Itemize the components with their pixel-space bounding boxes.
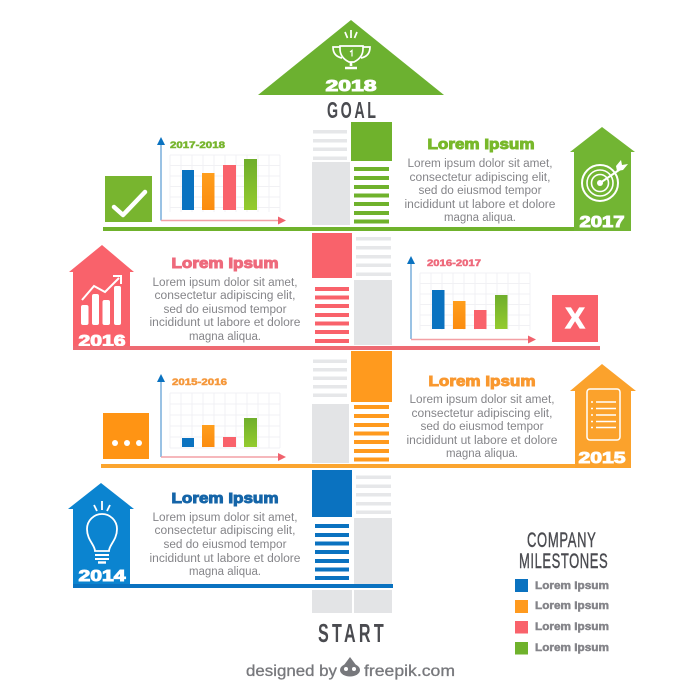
legend title: MILESTONES bbox=[519, 549, 608, 573]
icon: trophy bbox=[333, 30, 370, 68]
text block: magna aliqua. bbox=[189, 566, 261, 578]
central column: 2015 segment bbox=[312, 351, 392, 463]
house 2015: 2015 bbox=[578, 450, 626, 467]
text block: Lorem ipsum dolor sit amet, bbox=[152, 512, 298, 524]
legend: Lorem Ipsum bbox=[535, 642, 609, 654]
text block: sed do eiusmod tempor bbox=[164, 539, 287, 551]
text block: consectetur adipiscing elit, bbox=[410, 172, 550, 184]
text block: Lorem ipsum dolor sit amet, bbox=[152, 277, 298, 289]
text block bbox=[150, 512, 300, 578]
footer credit: designed by bbox=[246, 663, 337, 680]
bar chart 2015-2016: 2015-2016 bbox=[172, 377, 227, 388]
heading: Lorem Ipsum bbox=[428, 136, 534, 153]
label: start: START bbox=[318, 618, 384, 648]
icon: rising chart bbox=[81, 276, 121, 325]
panel: 2016 bbox=[69, 245, 600, 350]
icon: light bulb bbox=[87, 501, 117, 562]
heading: Lorem Ipsum bbox=[172, 490, 278, 507]
status box: cross bbox=[552, 295, 598, 342]
text block: consectetur adipiscing elit, bbox=[154, 290, 296, 302]
text block bbox=[406, 394, 558, 460]
text block: incididunt ut labore et dolore bbox=[150, 317, 300, 329]
text block: magna aliqua. bbox=[446, 448, 518, 460]
house 2016: 2016 bbox=[78, 333, 126, 350]
bar chart 2015-2016 bbox=[157, 374, 286, 461]
icon: target bbox=[582, 160, 628, 201]
baseline bbox=[73, 584, 393, 588]
bar chart 2016-2017: 2016-2017 bbox=[427, 258, 481, 269]
text block bbox=[404, 158, 556, 224]
text block: sed do eiusmod tempor bbox=[164, 304, 287, 316]
heading: Lorem Ipsum bbox=[428, 373, 536, 390]
legend bbox=[515, 528, 609, 654]
text block: incididunt ut labore et dolore bbox=[404, 199, 556, 211]
central column: 2016 segment bbox=[312, 233, 392, 345]
house 2017 bbox=[570, 127, 635, 231]
baseline bbox=[103, 227, 631, 231]
text block bbox=[150, 277, 300, 343]
status box: in progress bbox=[103, 413, 149, 459]
text block: magna aliqua. bbox=[189, 331, 261, 343]
footer credit: freepik.com bbox=[364, 663, 455, 680]
legend title bbox=[519, 528, 608, 573]
panel: 2015 bbox=[101, 364, 636, 468]
text block: incididunt ut labore et dolore bbox=[406, 435, 558, 447]
goal arrowhead 2018 bbox=[258, 20, 444, 95]
year 2018: 2018 bbox=[326, 78, 377, 95]
baseline bbox=[101, 464, 631, 468]
status box: check mark bbox=[105, 176, 152, 222]
bar chart 2017-2018 bbox=[157, 137, 286, 224]
heading: Lorem Ipsum bbox=[172, 255, 278, 272]
text block: Lorem ipsum dolor sit amet, bbox=[410, 394, 554, 406]
text block: magna aliqua. bbox=[444, 212, 516, 224]
legend: Lorem Ipsum bbox=[535, 580, 609, 592]
panel: 2014 bbox=[68, 483, 393, 588]
text block: Lorem ipsum dolor sit amet, bbox=[408, 158, 552, 170]
text block: sed do eiusmod tempor bbox=[418, 185, 542, 197]
panel: 2017 bbox=[103, 127, 635, 231]
house 2016 bbox=[69, 245, 134, 350]
baseline bbox=[73, 346, 600, 350]
status box: cross: X bbox=[565, 303, 585, 335]
label: goal: GOAL bbox=[327, 99, 376, 124]
icon: freepik mascot bbox=[340, 657, 360, 676]
footer credit bbox=[246, 657, 455, 680]
icon: document bbox=[587, 389, 620, 440]
text block: sed do eiusmod tempor bbox=[420, 421, 544, 433]
bar chart 2016-2017 bbox=[407, 256, 536, 344]
central column: 2017 segment bbox=[312, 122, 392, 225]
house 2017: 2017 bbox=[580, 214, 625, 231]
house 2014 bbox=[68, 483, 134, 588]
central column: 2014 segment bbox=[312, 470, 392, 613]
legend title: COMPANY bbox=[527, 528, 596, 552]
legend: Lorem Ipsum bbox=[535, 600, 609, 612]
house 2015 bbox=[570, 364, 636, 468]
bar chart 2017-2018: 2017-2018 bbox=[170, 140, 225, 151]
text block: incididunt ut labore et dolore bbox=[150, 553, 300, 565]
text block: consectetur adipiscing elit, bbox=[412, 408, 552, 420]
legend: Lorem Ipsum bbox=[535, 621, 609, 633]
text block: consectetur adipiscing elit, bbox=[154, 525, 296, 537]
house 2014: 2014 bbox=[78, 568, 126, 585]
